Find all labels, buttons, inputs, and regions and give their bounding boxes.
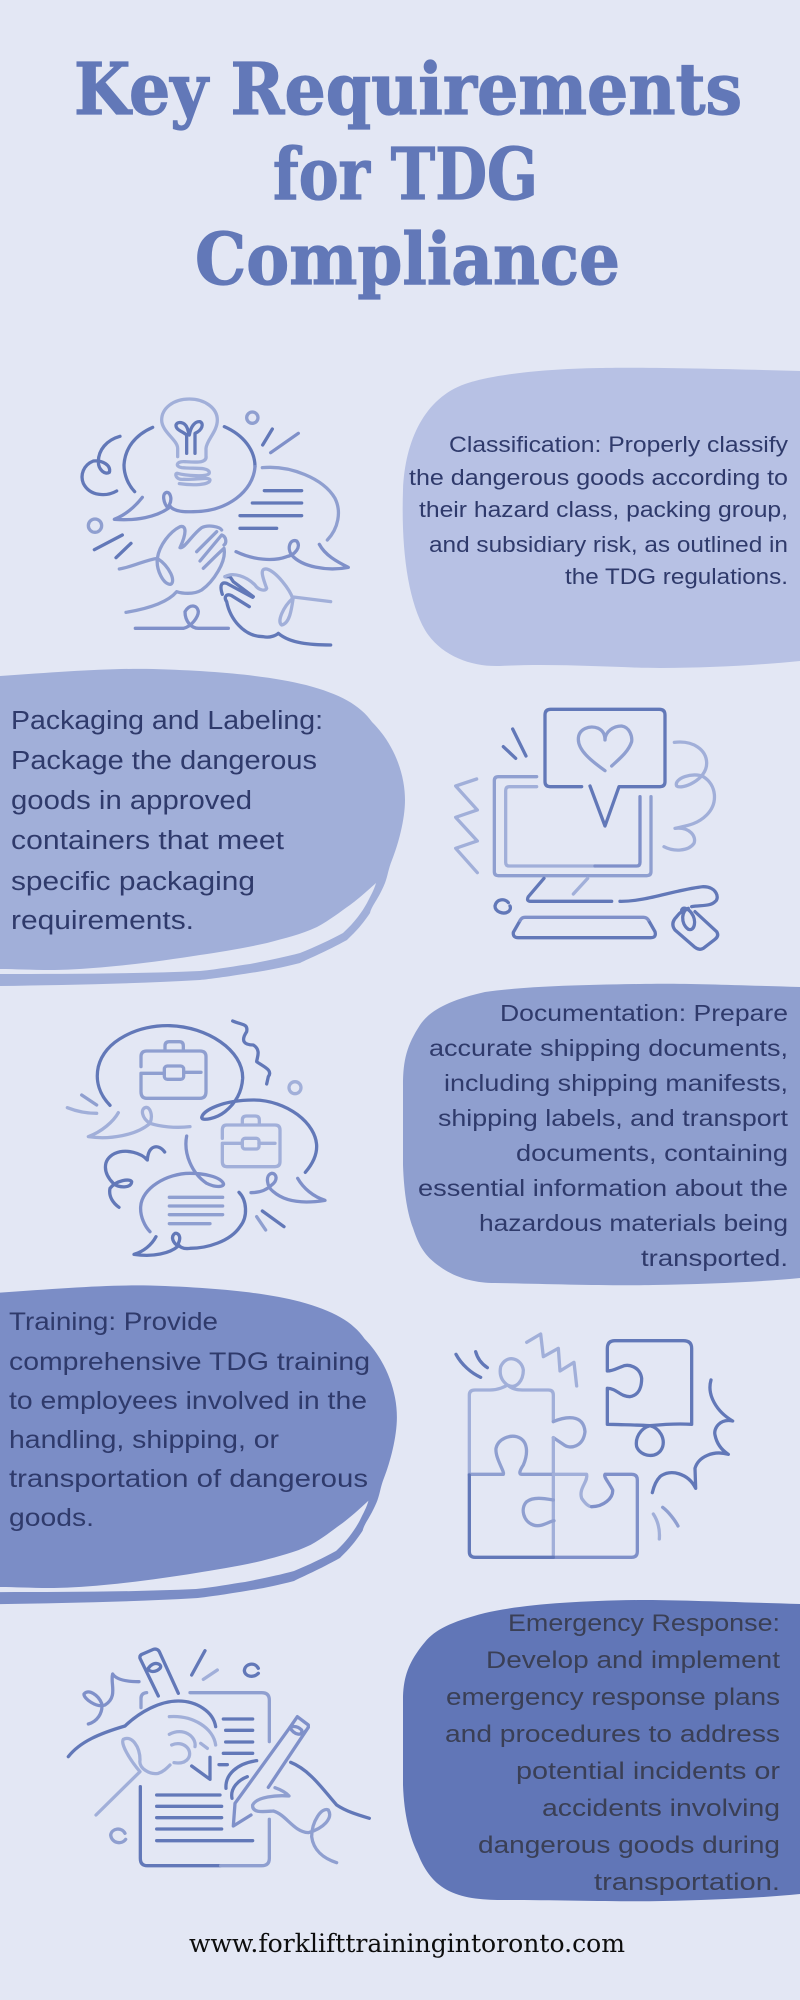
panel: classification	[403, 368, 800, 668]
panel: packaging and labeling	[0, 669, 405, 986]
swoosh: packaging and labeling	[0, 883, 376, 974]
icon: speech bubbles with briefcases	[67, 1021, 325, 1255]
blob: emergency response	[403, 1600, 800, 1901]
text: emergency response: Emergency Response:	[508, 1610, 780, 1637]
text: documentation: including shipping manifests,	[444, 1070, 788, 1096]
text: emergency response: transportation.	[594, 1869, 780, 1896]
text: packaging and labeling: Package the dangerous	[11, 747, 317, 775]
text: training	[9, 1308, 370, 1532]
text: documentation: shipping labels, and transport	[438, 1105, 789, 1131]
blob: classification	[403, 368, 800, 668]
panel: emergency response	[403, 1600, 800, 1901]
text: packaging and labeling: specific packaging	[11, 868, 255, 896]
blob: packaging and labeling	[0, 669, 405, 986]
blob: documentation	[403, 984, 800, 1285]
text: documentation: transported.	[641, 1245, 788, 1271]
text: training: goods.	[9, 1504, 94, 1532]
text: packaging and labeling	[11, 707, 323, 935]
text: training: transportation of dangerous	[9, 1465, 368, 1493]
text: emergency response: Develop and implement	[486, 1647, 780, 1674]
text: training: to employees involved in the	[9, 1387, 367, 1415]
text: emergency response: dangerous goods during	[478, 1832, 780, 1859]
text: classification: their hazard class, packing group,	[419, 497, 788, 522]
text: documentation	[418, 1000, 789, 1271]
text: documentation: essential information about the	[418, 1175, 788, 1201]
text: training: comprehensive TDG training	[9, 1348, 370, 1376]
icon: hand writing on document	[68, 1649, 369, 1866]
text: training: handling, shipping, or	[9, 1426, 279, 1454]
text: emergency response: emergency response plans	[446, 1684, 780, 1711]
swoosh: training	[0, 1501, 368, 1592]
text: emergency response: accidents involving	[542, 1795, 780, 1822]
footer: website url: www.forklifttrainingintoronto.com	[189, 1929, 625, 1958]
panel: training	[0, 1285, 397, 1604]
text: documentation: documents, containing	[516, 1140, 788, 1166]
title: Key Requirements	[74, 47, 742, 131]
text: documentation: Documentation: Prepare	[500, 1000, 788, 1026]
text: classification: the dangerous goods according to	[409, 465, 788, 490]
text: classification: the TDG regulations.	[565, 564, 788, 589]
text: classification: and subsidiary risk, as outlined in	[429, 532, 788, 557]
title: for TDG	[273, 132, 538, 216]
text: training: Training: Provide	[9, 1308, 218, 1336]
title	[74, 47, 742, 301]
title: Compliance	[195, 217, 620, 301]
icon: computer with heart speech bubble	[456, 709, 718, 949]
text: packaging and labeling: goods in approved	[11, 787, 252, 815]
text: emergency response: and procedures to address	[445, 1721, 780, 1748]
text: classification: Classification: Properly classify	[449, 432, 789, 457]
text: classification	[409, 432, 789, 589]
text: documentation: accurate shipping documents,	[429, 1035, 788, 1061]
text: packaging and labeling: containers that meet	[11, 827, 284, 855]
text: emergency response	[445, 1610, 780, 1896]
text: packaging and labeling: requirements.	[11, 907, 194, 935]
text: packaging and labeling: Packaging and Labeling:	[11, 707, 323, 735]
text: documentation: hazardous materials being	[479, 1210, 788, 1236]
blob: training	[0, 1285, 397, 1604]
text: emergency response: potential incidents or	[516, 1758, 780, 1785]
panel: documentation	[403, 984, 800, 1285]
icon: puzzle pieces	[456, 1334, 733, 1557]
icon: light bulb, speech bubbles and hands	[82, 399, 348, 645]
